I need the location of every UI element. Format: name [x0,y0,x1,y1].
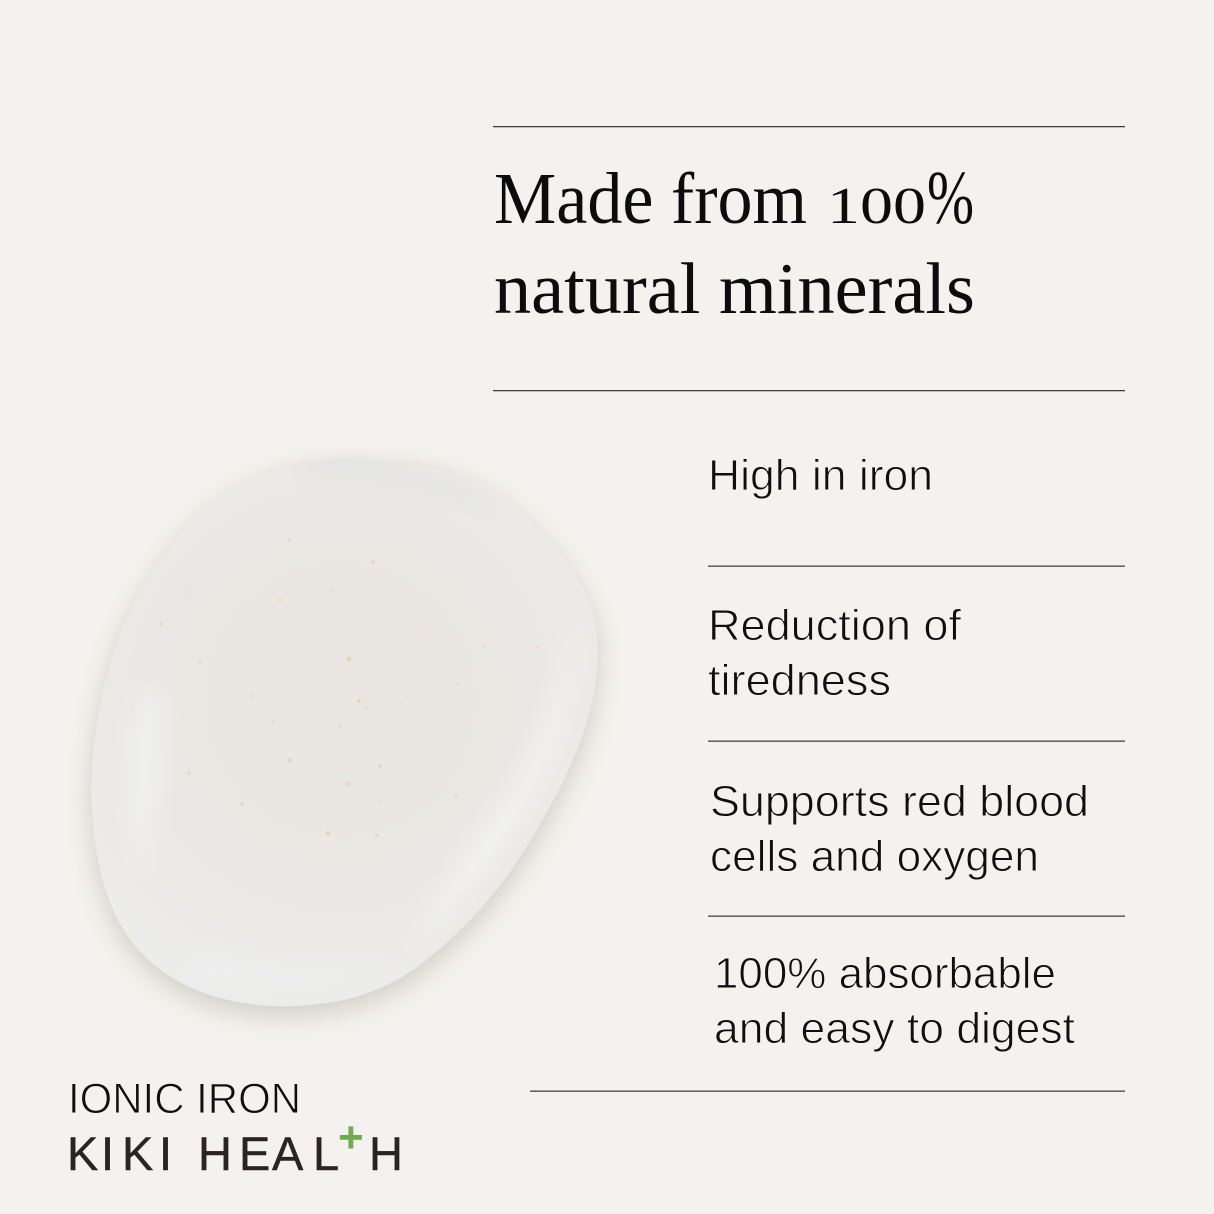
heading: 100 [827,178,926,235]
heading [494,156,975,329]
brand logo: Kiki Health [67,1113,403,1180]
brand logo: Kiki Health: H [369,1127,403,1180]
logo plus sign: + [338,1113,364,1162]
benefit: absorbable and easy to digest: 100% absorbable [714,949,1056,998]
product swatch: gel drop [91,450,598,1015]
top rule [493,126,1125,127]
benefit divider 3 [708,916,1125,917]
benefit: absorbable and easy to digest [714,949,1075,1053]
heading: Made from [494,158,807,239]
benefit: reduction of tiredness [708,601,962,705]
benefit: supports red blood cells and oxygen: cells and oxygen [710,832,1039,881]
brand logo: Kiki Health: KIKIHEAL [67,1127,339,1180]
bottom rule [530,1090,1125,1092]
heading: % [927,156,974,240]
heading bottom rule [493,390,1125,391]
benefit divider 1 [708,566,1125,567]
product name: IONIC IRON [68,1075,301,1123]
benefit: supports red blood cells and oxygen: Supports red blood [710,777,1089,826]
benefit: reduction of tiredness: tiredness [708,656,891,705]
benefit divider 2 [708,740,1125,742]
heading: natural minerals [494,248,975,329]
benefit: supports red blood cells and oxygen [710,777,1089,881]
benefit: high in iron: High in iron [708,451,933,500]
benefit: reduction of tiredness: Reduction of [708,601,962,650]
benefit: absorbable and easy to digest: and easy to digest [714,1004,1075,1053]
